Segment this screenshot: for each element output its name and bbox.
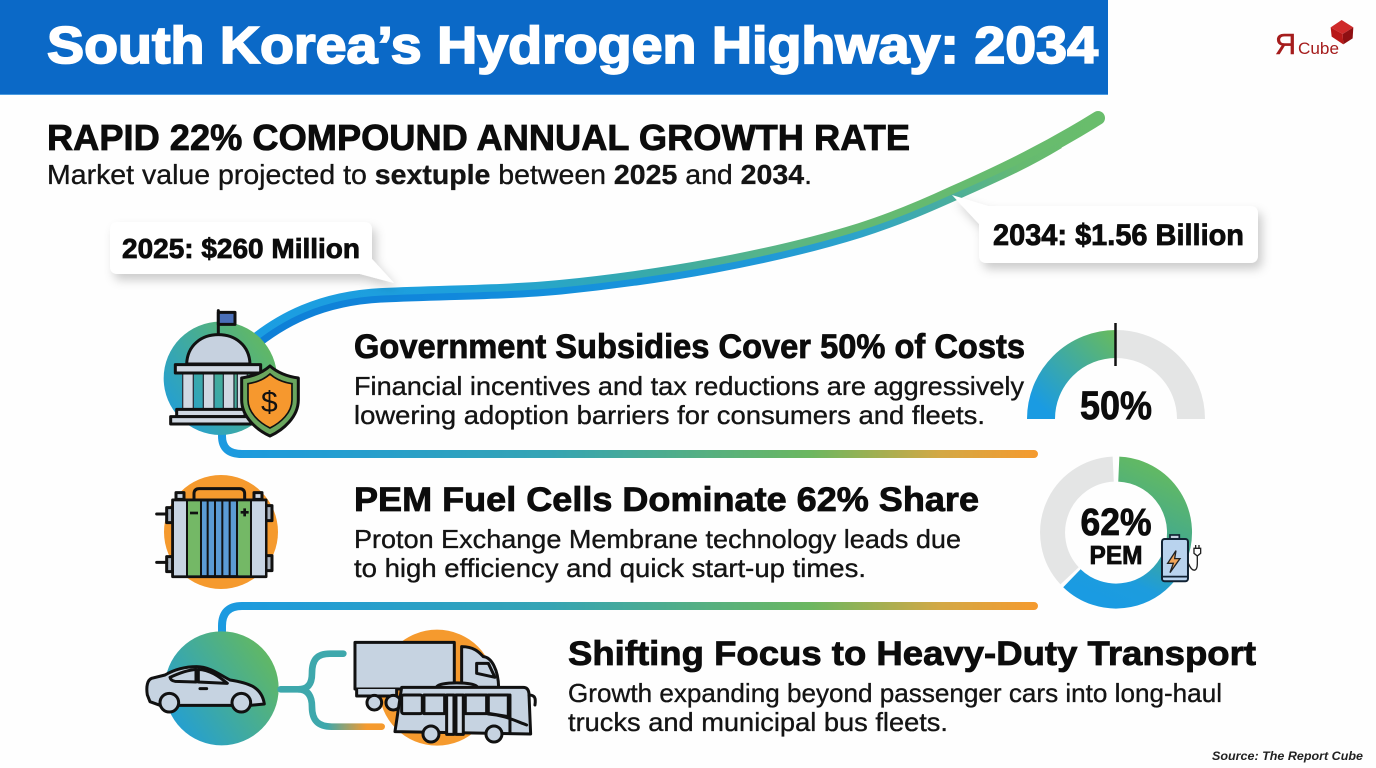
source note: Source: The Report Cube <box>1212 749 1363 763</box>
donut chart: 62 percent PEM <box>1053 469 1201 596</box>
callout: 2034 value <box>952 195 1258 263</box>
callout: 2034 value: 2034: $1.56 Billion <box>993 219 1244 252</box>
callout: 2025 value: 2025: $260 Million <box>122 233 360 264</box>
branching connector: car to truck and bus <box>281 654 382 727</box>
row two description <box>354 524 961 583</box>
row one heading: Government Subsidies Cover 50% of Costs <box>354 328 1025 366</box>
callout: 2025 value <box>110 222 394 283</box>
row two description: Proton Exchange Membrane technology leads due <box>354 524 961 554</box>
row three heading: Shifting Focus to Heavy-Duty Transport <box>568 635 1256 673</box>
logo: RCube <box>1275 20 1353 61</box>
title: South Korea’s Hydrogen Highway: 2034 <box>47 17 1098 75</box>
row one description: Financial incentives and tax reductions are aggressively <box>354 371 1024 401</box>
gauge: 50 percent <box>1041 323 1191 428</box>
icon: battery with plug <box>1162 535 1201 581</box>
gauge: 50 percent: 50% <box>1080 384 1152 428</box>
growth curve <box>250 118 1098 349</box>
icon: government building with shield: $ <box>261 386 278 419</box>
row three description: trucks and municipal bus fleets. <box>568 707 948 737</box>
icon: government building with shield <box>164 311 298 436</box>
row one description <box>354 371 1024 430</box>
logo: RCube: Я <box>1275 29 1296 61</box>
donut chart: 62 percent PEM: 62% <box>1080 502 1152 544</box>
row three description: Growth expanding beyond passenger cars into long-haul <box>568 678 1222 708</box>
donut chart: 62 percent PEM: PEM <box>1090 540 1142 570</box>
row one description: lowering adoption barriers for consumers and fleets. <box>354 400 985 430</box>
row two description: to high efficiency and quick start-up times. <box>354 553 866 583</box>
icon: passenger car in circle <box>147 631 279 745</box>
connector: row two to row three <box>222 606 1034 634</box>
icon: truck and bus on orange circle <box>355 630 535 746</box>
header banner <box>0 0 1108 95</box>
subheading: market value: Market value projected to sextuple between 2025 and 2034. <box>47 159 812 190</box>
row two heading: PEM Fuel Cells Dominate 62% Share <box>354 481 979 519</box>
icon: fuel cell stack <box>157 475 278 589</box>
logo: RCube: Cube <box>1298 39 1339 58</box>
row three description <box>568 678 1222 737</box>
connector: row one to row two <box>222 432 1034 454</box>
heading: growth rate: RAPID 22% COMPOUND ANNUAL GROWTH RATE <box>47 117 910 158</box>
